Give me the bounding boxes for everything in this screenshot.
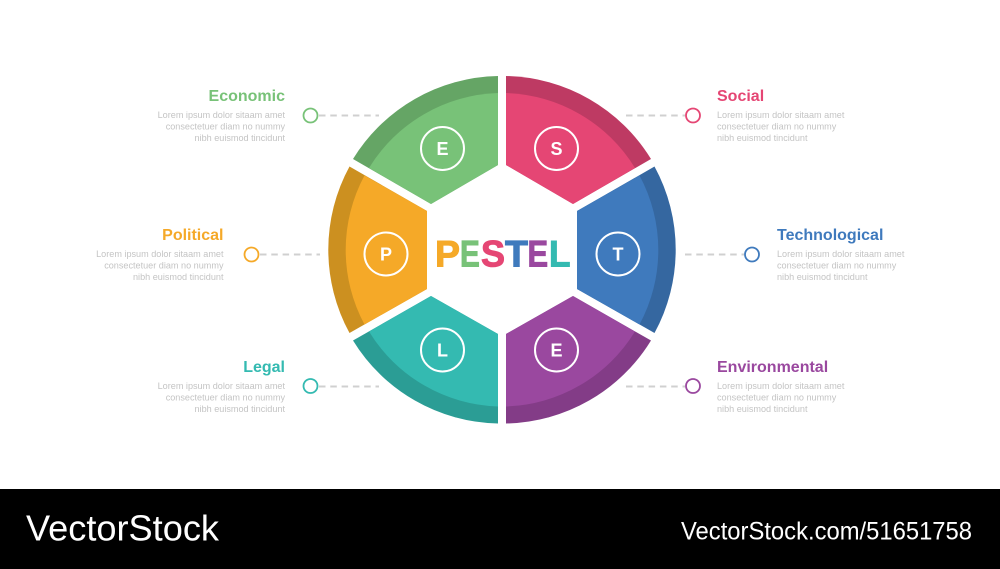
callout: Political [96, 227, 320, 282]
callout: Political: Political [162, 227, 224, 244]
callout: Economic: Lorem ipsum dolor sitaam amet [158, 110, 285, 120]
segment: Economic [353, 76, 498, 204]
center title: P [435, 234, 460, 274]
segment: Legal [353, 296, 498, 424]
center title: L [549, 234, 570, 274]
callout: Social: consectetuer diam no nummy [717, 122, 837, 132]
callout: Social: Social [717, 88, 764, 105]
segment: Political: P [380, 244, 392, 264]
center title: E [460, 234, 480, 274]
center title [435, 234, 570, 274]
segment: Technological: T [612, 244, 624, 264]
callout: Environmental: consectetuer diam no nummy [717, 392, 837, 402]
callout: Economic: Economic [209, 88, 285, 105]
callout: Legal: Legal [243, 359, 285, 376]
segment: Environmental [506, 296, 651, 424]
center title: E [528, 234, 548, 274]
callout: Environmental: Environmental [717, 359, 828, 376]
footer bar: VectorStock [26, 508, 220, 548]
callout: Political: nibh euismod tincidunt [133, 272, 224, 282]
segment: Technological [577, 166, 676, 333]
callout: Political: consectetuer diam no nummy [104, 260, 224, 270]
callout: Technological: Lorem ipsum dolor sitaam amet [777, 249, 905, 259]
callout: Social: nibh euismod tincidunt [717, 133, 808, 143]
callout: Environmental: Lorem ipsum dolor sitaam amet [717, 381, 845, 391]
segment: Political [328, 166, 427, 333]
segment: Social [506, 76, 651, 204]
footer bar: VectorStock.com/51651758 [681, 518, 972, 546]
callout: Social [626, 88, 845, 143]
callout: Environmental: nibh euismod tincidunt [717, 404, 808, 414]
callout: Legal [158, 359, 379, 414]
footer bar [0, 489, 1000, 569]
callout: Social: Lorem ipsum dolor sitaam amet [717, 110, 845, 120]
callout: Technological: Technological [777, 227, 883, 244]
segment: Economic: E [436, 139, 449, 159]
callout: Technological [685, 227, 905, 282]
callout: Environmental [626, 359, 845, 414]
callout: Economic: nibh euismod tincidunt [194, 133, 285, 143]
center title: T [505, 234, 528, 274]
callout: Legal: nibh euismod tincidunt [194, 404, 285, 414]
segment: Environmental: E [550, 340, 563, 360]
callout: Political: Lorem ipsum dolor sitaam amet [96, 249, 224, 259]
callout: Legal: consectetuer diam no nummy [166, 392, 285, 402]
segment: Legal: L [437, 340, 448, 360]
segment: Social: S [550, 139, 563, 159]
callout: Legal: Lorem ipsum dolor sitaam amet [158, 381, 285, 391]
callout: Economic [158, 88, 379, 143]
callout: Technological: consectetuer diam no nummy [777, 260, 897, 270]
callout: Technological: nibh euismod tincidunt [777, 272, 868, 282]
callout: Economic: consectetuer diam no nummy [166, 122, 285, 132]
center title: S [481, 234, 505, 274]
